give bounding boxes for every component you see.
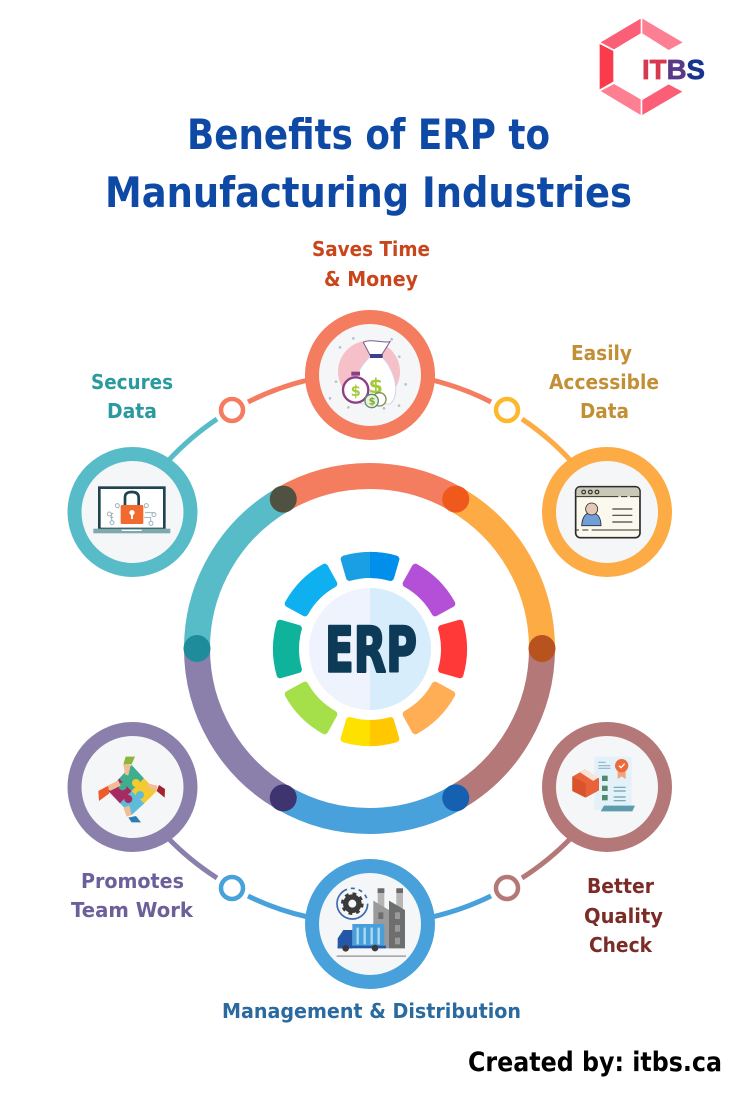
ERP badge [276,555,464,743]
label: secures data: Secures [91,370,173,394]
label: easily accessible data: Accessible [549,370,659,394]
label: better quality check: Quality [584,904,663,928]
title [105,110,632,217]
node: saves time and money [312,317,428,433]
label: easily accessible data: Easily [571,341,632,365]
icon: profile window [576,487,640,538]
centre disc [309,588,431,710]
icon: laptop with padlock [93,488,170,533]
label: saves time and money: Saves Time [312,237,430,261]
label: easily accessible data: Data [580,399,629,423]
colour segments [276,555,464,743]
node: management and distribution [312,866,428,982]
label: promotes team work: Team Work [71,898,194,922]
label: saves time and money [312,237,430,291]
icon: money bag and stopwatch: $ [351,383,361,400]
label: management and distribution: Management & Distribution [222,999,521,1023]
icon: money bag and stopwatch [329,337,407,410]
icon: money bag and stopwatch: $ [369,397,376,408]
icon: puzzle and hands [98,757,165,822]
label: saves time and money: & Money [324,267,418,291]
logo: ITBS [600,19,705,115]
label: promotes team work [71,869,194,922]
node: promotes team work [74,729,190,845]
node: better quality check [549,729,665,845]
title: Benefits of ERP to [187,110,550,159]
node: easily accessible data [549,454,665,570]
label: secures data [91,370,173,423]
label: better quality check [584,874,663,957]
label: secures data: Data [107,399,157,423]
label: promotes team work: Promotes [81,869,184,893]
node: secures data [74,454,190,570]
icon: checklist and parcel [572,757,635,811]
label: easily accessible data [549,341,659,423]
central segmented ring [184,476,556,821]
ERP wordmark: ERP [325,614,417,686]
title: Manufacturing Industries [105,168,632,217]
small connector rings [221,399,518,899]
logo: ITBS: ITBS [642,54,705,85]
icon: money bag and stopwatch: $ [369,374,383,398]
icon: factory, gear and truck [337,888,406,957]
connector arcs between outer circles [168,380,571,917]
label: better quality check: Check [589,933,653,957]
label: better quality check: Better [587,874,655,898]
